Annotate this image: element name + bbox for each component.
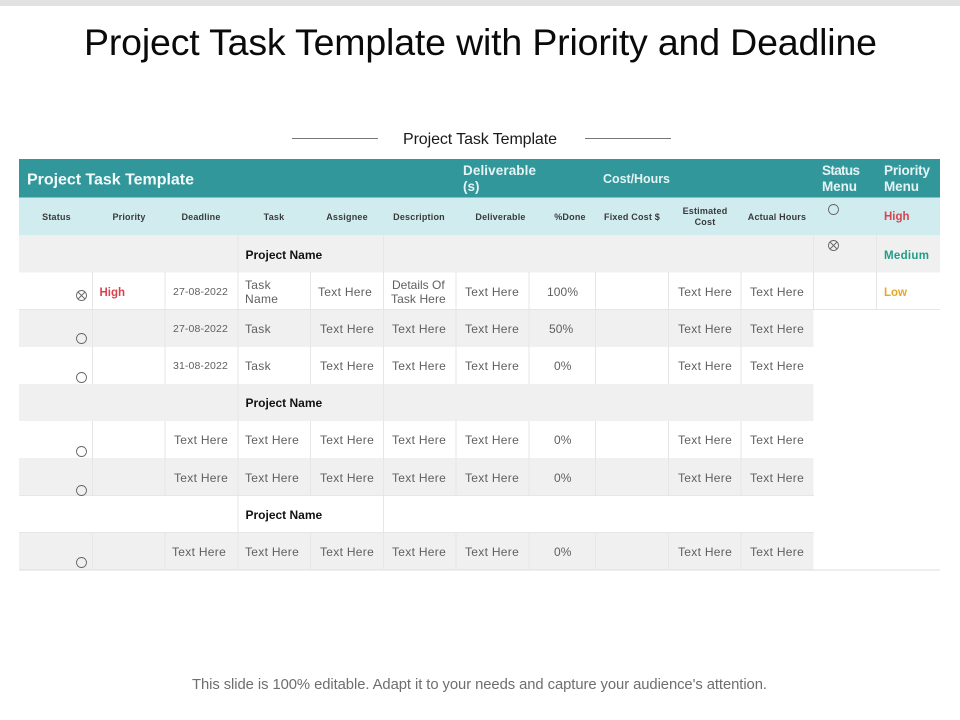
column headings row: Actual Hours — [748, 212, 806, 222]
task row 5 — [76, 471, 804, 496]
task row 4: Text Here — [465, 433, 519, 447]
task row 6: Text Here — [320, 545, 374, 559]
task row 2: Text Here — [678, 322, 732, 336]
task row 3: Text Here — [750, 359, 804, 373]
task row 1: 27-08-2022 — [173, 286, 228, 298]
task row 2: Text Here — [465, 322, 519, 336]
task row 3: 0% — [554, 359, 572, 373]
task row 6: Text Here — [678, 545, 732, 559]
column headings row: %Done — [554, 212, 586, 222]
project group 3: Project Name — [246, 508, 323, 522]
column headings row: Assignee — [326, 212, 368, 222]
table header band: Status — [822, 163, 860, 178]
task row 6 — [76, 545, 804, 568]
project group 2 — [76, 396, 804, 496]
task row 2 — [76, 322, 804, 344]
task row 2: 50% — [549, 322, 574, 336]
task row 1: Text Here — [465, 285, 519, 299]
task row 5: Text Here — [678, 471, 732, 485]
task row 5: Text Here — [392, 471, 446, 485]
table header band: (s) — [463, 179, 480, 194]
project group 2: Project Name — [246, 396, 323, 410]
task row 2: Text Here — [392, 322, 446, 336]
status and priority menu: High — [884, 211, 910, 223]
task row 4: Text Here — [392, 433, 446, 447]
table header band: Project Task Template — [27, 172, 194, 188]
task row 5: Text Here — [465, 471, 519, 485]
task row 2: Text Here — [320, 322, 374, 336]
task row 6: Text Here — [465, 545, 519, 559]
task row 2: Text Here — [750, 322, 804, 336]
task row 3: Text Here — [465, 359, 519, 373]
status and priority menu: Medium — [884, 250, 929, 262]
project group 1: Project Name — [246, 248, 323, 262]
table header band: Priority — [884, 163, 930, 178]
task table — [19, 159, 940, 570]
task row 2: 27-08-2022 — [173, 323, 228, 335]
task row 4: Text Here — [174, 433, 228, 447]
task row 4: Text Here — [678, 433, 732, 447]
task row 1: Text Here — [318, 285, 372, 299]
column headings row: Status — [42, 212, 71, 222]
task row 1: 100% — [547, 285, 578, 299]
status and priority menu: Low — [884, 287, 907, 299]
task row 5: Text Here — [174, 471, 228, 485]
task row 6: Text Here — [750, 545, 804, 559]
column headings row: Deadline — [181, 212, 221, 222]
task row 4 — [76, 433, 804, 456]
task row 3 — [76, 359, 804, 382]
task row 3: Task — [245, 359, 272, 373]
task row 1: Details Of — [392, 278, 445, 292]
column headings row: Cost — [695, 217, 715, 227]
project group 3 — [76, 508, 804, 568]
project group 1 — [76, 248, 804, 382]
task row 3: Text Here — [678, 359, 732, 373]
task row 2: Task — [245, 322, 272, 336]
table header band: Menu — [822, 179, 857, 194]
task row 4: 0% — [554, 433, 572, 447]
task row 4: Text Here — [320, 433, 374, 447]
row backgrounds — [19, 235, 940, 570]
column headings row: Description — [393, 212, 445, 222]
table header band: Deliverable — [463, 163, 536, 178]
table header band: Menu — [884, 179, 919, 194]
task row 1 — [76, 278, 804, 306]
task row 1: Task — [245, 278, 272, 292]
task row 4: Text Here — [750, 433, 804, 447]
footer note: This slide is 100% editable. Adapt it to your needs and capture your audience's attention. — [192, 677, 767, 693]
column dividers — [92, 235, 876, 570]
task row 3: 31-08-2022 — [173, 360, 228, 372]
task row 1: High — [100, 287, 125, 299]
column headings row: Task — [264, 212, 285, 222]
task row 6: Text Here — [392, 545, 446, 559]
column headings row — [19, 198, 940, 235]
task row 5: Text Here — [750, 471, 804, 485]
task row 6: Text Here — [245, 545, 299, 559]
table header band — [19, 159, 940, 198]
subtitle with rules: Project Task Template — [403, 131, 557, 148]
task row 3: Text Here — [392, 359, 446, 373]
status and priority menu — [828, 204, 929, 299]
column headings row: Priority — [112, 212, 146, 222]
task row 4: Text Here — [245, 433, 299, 447]
task row 3: Text Here — [320, 359, 374, 373]
task row 1: Text Here — [678, 285, 732, 299]
task row 1: Task Here — [391, 292, 446, 306]
task row 6: 0% — [554, 545, 572, 559]
task row 5: Text Here — [245, 471, 299, 485]
table header band: Cost/Hours — [603, 172, 670, 186]
task row 5: 0% — [554, 471, 572, 485]
task row 5: Text Here — [320, 471, 374, 485]
column headings row: Estimated — [683, 206, 727, 216]
column headings row: Fixed Cost $ — [604, 212, 660, 222]
task row 1: Name — [245, 292, 278, 306]
task row 6: Text Here — [172, 545, 226, 559]
task row 1: Text Here — [750, 285, 804, 299]
title: Project Task Template with Priority and Deadline — [84, 21, 877, 63]
column headings row: Deliverable — [475, 212, 526, 222]
